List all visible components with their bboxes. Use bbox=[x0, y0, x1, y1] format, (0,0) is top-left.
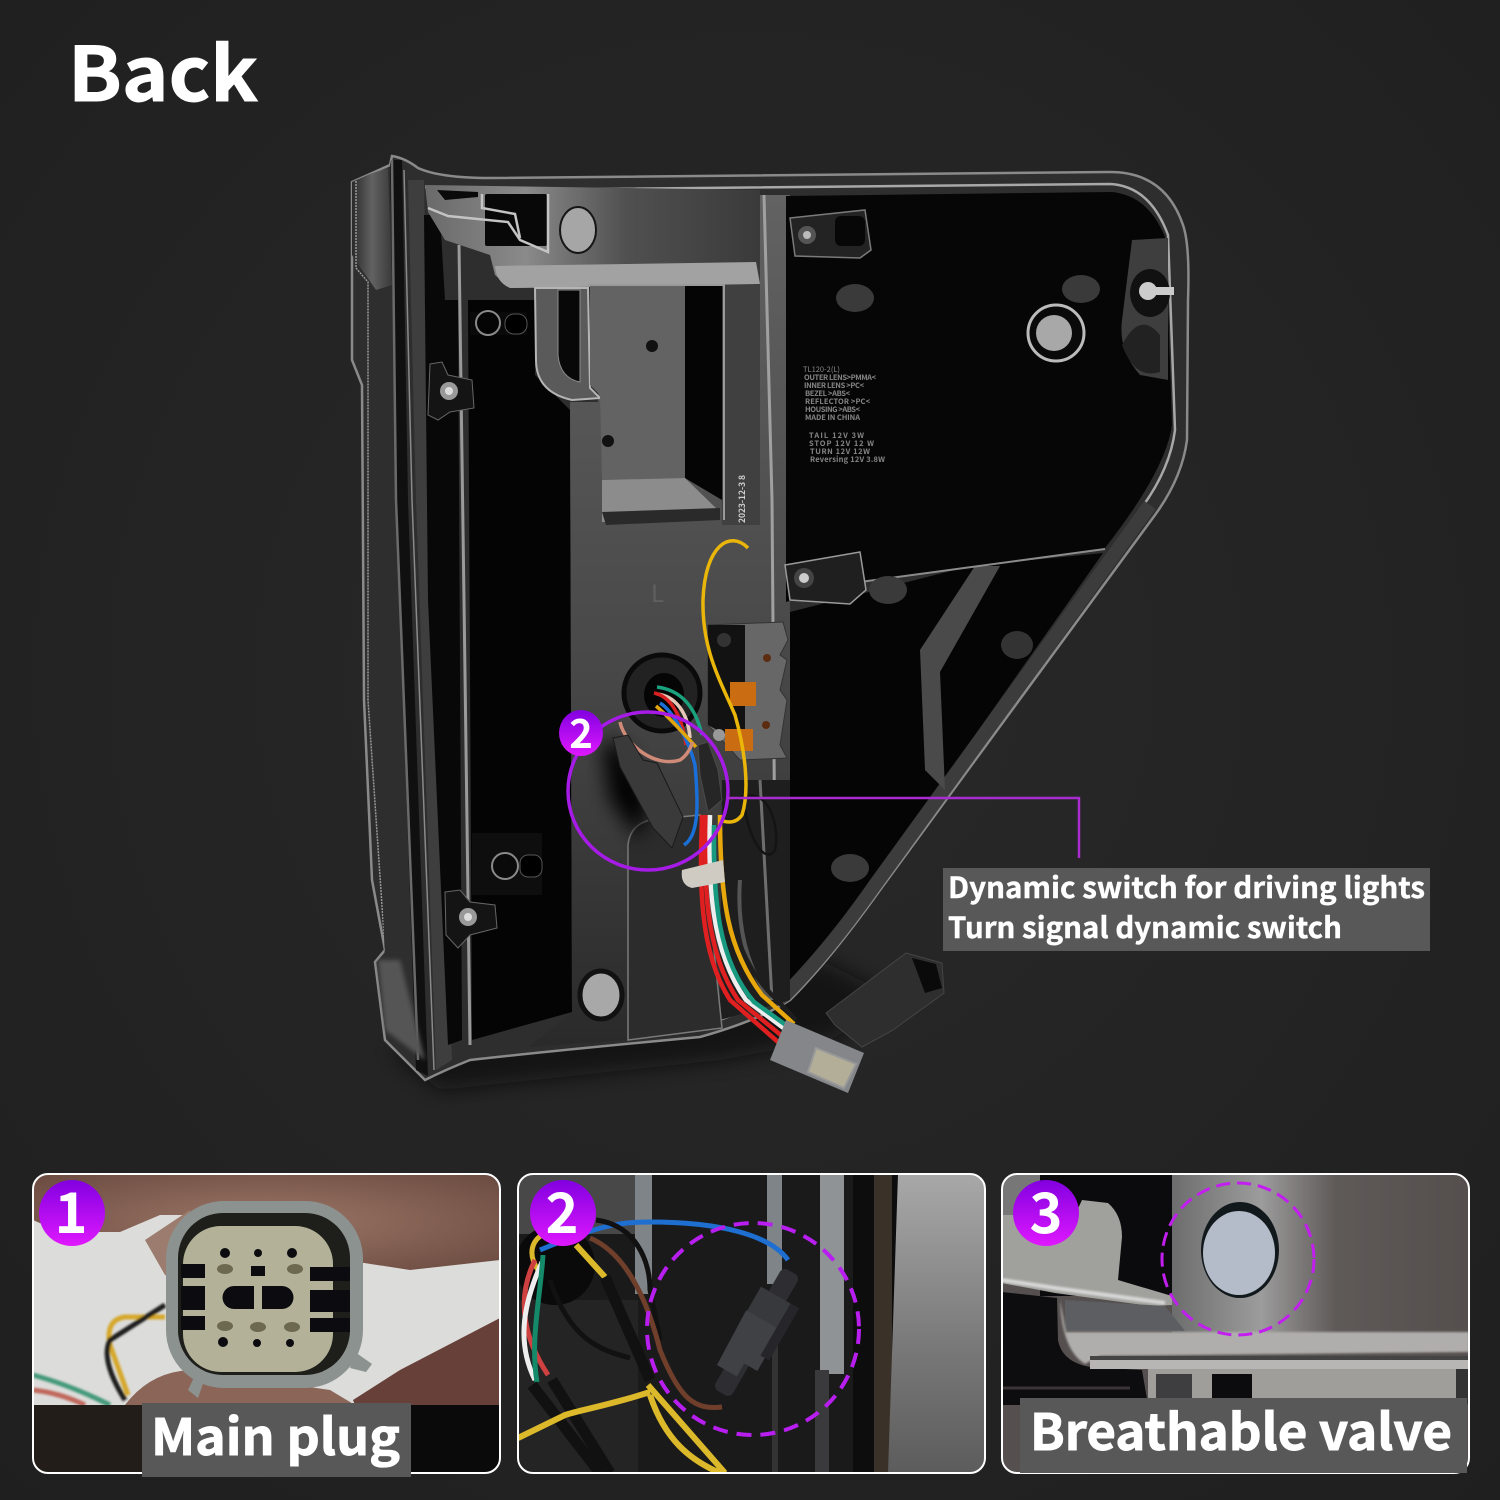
wire clip bbox=[682, 860, 725, 888]
switch connector right bbox=[698, 742, 722, 812]
molded label: TURN 12V 12W bbox=[810, 446, 870, 457]
molded label: STOP 12V 12 W bbox=[809, 438, 874, 449]
dashed ring bbox=[1162, 1183, 1314, 1335]
valve bbox=[1201, 1202, 1279, 1298]
lower right facet bbox=[920, 566, 1000, 790]
badge 3 bbox=[1013, 1169, 1079, 1250]
sleeves bbox=[532, 1277, 650, 1473]
left posts bbox=[470, 311, 527, 335]
wires into grommet bbox=[620, 687, 702, 845]
wire harness bbox=[701, 815, 796, 1042]
molded label: TAIL 12V 3W bbox=[809, 430, 864, 441]
badge 1: 1 bbox=[54, 1169, 88, 1250]
small posts bbox=[602, 340, 658, 447]
yellow wire bbox=[703, 541, 748, 822]
ribs bbox=[635, 1174, 844, 1374]
switch connector left bbox=[613, 735, 683, 848]
metal backdrop bbox=[888, 1174, 985, 1473]
callout text bbox=[943, 865, 1430, 951]
wire loop bbox=[735, 795, 776, 854]
right mounting bolt bbox=[1121, 238, 1174, 380]
center grey panel bbox=[570, 195, 790, 1020]
left black strip bbox=[424, 215, 462, 1045]
lower right black panel bbox=[790, 553, 1103, 985]
molded label: INNER LENS >PC< bbox=[804, 380, 865, 391]
lower dark block bbox=[1002, 1292, 1148, 1405]
callout text: Turn signal dynamic switch bbox=[948, 905, 1342, 947]
top bracket bbox=[790, 210, 871, 258]
molded label bbox=[803, 364, 885, 465]
dark strip bbox=[411, 1405, 499, 1472]
lower frames bbox=[1148, 1369, 1470, 1404]
left flange bbox=[352, 168, 392, 290]
dark top window bbox=[1040, 1174, 1172, 1296]
breather valve right bbox=[1028, 305, 1084, 361]
panel: main plug bbox=[33, 1169, 500, 1477]
grey plug bbox=[770, 1020, 864, 1093]
molded label: HOUSING >ABS< bbox=[805, 404, 861, 415]
light strip bbox=[1060, 1300, 1469, 1364]
panel: switch close-up bbox=[515, 1169, 985, 1473]
bottom glass bbox=[378, 960, 425, 1060]
label: breathable valve: Breathable valve bbox=[1030, 1393, 1452, 1465]
vertical rib bbox=[762, 195, 776, 780]
panel: breathable valve bbox=[1002, 1169, 1470, 1473]
connector bbox=[715, 1269, 799, 1396]
stepped highlight bbox=[428, 194, 548, 252]
tail light rear view bbox=[352, 156, 1188, 1093]
grey fill strip bbox=[1065, 1300, 1185, 1331]
grey recess panel bbox=[590, 285, 685, 480]
callout leader line bbox=[727, 798, 1079, 858]
molded label: REFLECTOR >PC< bbox=[805, 396, 871, 407]
badge 2 bbox=[530, 1169, 596, 1250]
callout ring bbox=[568, 712, 728, 870]
valve backdrop bbox=[1172, 1174, 1469, 1336]
lamp interior bbox=[352, 160, 1175, 1076]
stepped grey frame bbox=[1002, 1200, 1172, 1306]
breather cap top bbox=[560, 207, 596, 253]
left clip screw upper bbox=[428, 362, 474, 420]
number badge 2: 2 bbox=[569, 702, 593, 760]
title: Back bbox=[68, 14, 258, 123]
badge 3: 3 bbox=[1029, 1169, 1063, 1250]
black mating connector bbox=[826, 953, 944, 1047]
grommet bbox=[624, 655, 700, 731]
wires bbox=[524, 1220, 788, 1407]
diagonal rim band bbox=[780, 505, 1150, 1000]
date code: 2023-12-3 8 bbox=[736, 475, 748, 523]
dark recess bbox=[685, 285, 722, 500]
molded label: BEZEL >ABS< bbox=[805, 388, 851, 399]
badge 1 bbox=[39, 1169, 105, 1250]
recess step facet bbox=[602, 478, 720, 522]
grommet bbox=[519, 1230, 595, 1305]
rim top band bbox=[425, 184, 1175, 1027]
small wires bbox=[33, 1305, 165, 1405]
drop shadow bbox=[390, 960, 900, 1090]
lamp housing bbox=[352, 156, 1188, 1080]
dark window bbox=[485, 194, 547, 246]
U channel bbox=[535, 288, 600, 400]
upper slot bbox=[437, 190, 478, 200]
bottom breather cap bbox=[580, 971, 622, 1019]
metal bracket bbox=[708, 622, 788, 760]
molded label: Reversing 12V 3.8W bbox=[810, 454, 885, 465]
yellow leads bbox=[518, 1385, 725, 1473]
molded label: MADE IN CHINA bbox=[805, 412, 860, 423]
lower light strip bbox=[495, 262, 760, 288]
lower center tab bbox=[628, 815, 722, 1040]
fingers bbox=[33, 1174, 500, 1270]
mesh pads bbox=[831, 275, 1100, 882]
right black panel bbox=[786, 192, 1172, 602]
middle bracket bbox=[785, 552, 866, 604]
callout text: Dynamic switch for driving lights bbox=[948, 865, 1425, 907]
dashed ring bbox=[647, 1223, 859, 1435]
top stepped frame bbox=[425, 185, 760, 288]
connector shadow bbox=[602, 740, 650, 840]
number badge 2 bbox=[559, 702, 603, 760]
molded label: TL120-2(L) bbox=[803, 364, 840, 375]
glass band bbox=[390, 160, 428, 1076]
lower center shade bbox=[720, 780, 790, 1020]
molded label: OUTER LENS>PMMA< bbox=[804, 372, 877, 383]
label: main plug: Main plug bbox=[151, 1398, 400, 1470]
side letter L: L bbox=[651, 574, 664, 609]
left clip screw lower bbox=[445, 890, 497, 948]
plug face bbox=[166, 1201, 363, 1388]
top-left grey bbox=[1002, 1174, 1042, 1234]
badge 2: 2 bbox=[545, 1169, 579, 1250]
